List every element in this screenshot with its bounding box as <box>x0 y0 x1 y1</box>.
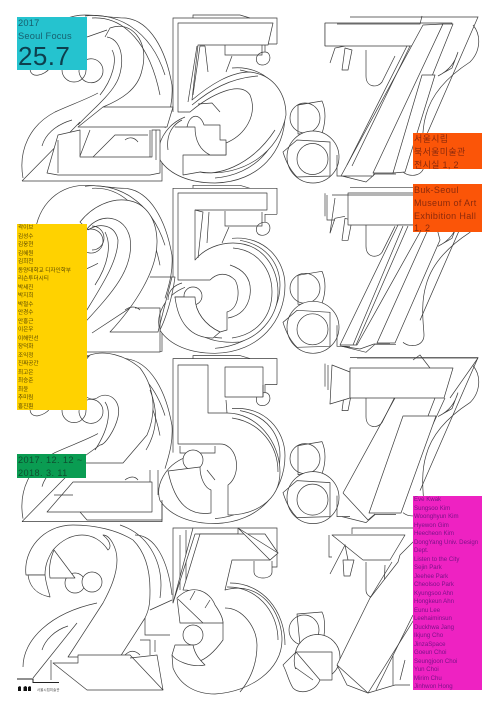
box: magenta artists English: DongYang Univ. Design <box>414 538 478 546</box>
numeral 7, row 4 <box>329 528 420 693</box>
logo: Seoul Museum of Art <box>17 678 60 692</box>
box: magenta artists English: Heecheon Kim <box>414 530 454 537</box>
box: magenta artists English: Leehaiminsun <box>414 615 452 622</box>
box: yellow artists Korean: 동양대학교 디자인학부 <box>18 268 71 274</box>
numeral 2, row 1 <box>47 26 173 175</box>
row 3: 25.7 <box>22 353 479 524</box>
box: teal title: 2017 <box>18 18 39 28</box>
box: yellow artists Korean: 박지희 <box>18 293 33 299</box>
box: green dates: 2018. 3. 11 <box>18 468 68 478</box>
box: green dates <box>17 454 86 478</box>
numeral 2, row 3 <box>47 353 162 520</box>
numeral 5, row 2 <box>168 193 278 342</box>
box: orange venue Korean: 북서울미술관 <box>414 147 465 157</box>
box: orange venue English: Buk-Seoul <box>414 185 459 195</box>
period, row 4 <box>283 612 340 692</box>
row 1: 25.7 <box>22 15 479 183</box>
box: yellow artists Korean: 박철수 <box>18 302 33 308</box>
numeral 5, row 3 <box>168 365 280 515</box>
box: magenta artists English: Eunu Lee <box>414 606 440 614</box>
box: magenta artists English: Eve Kwak <box>414 496 441 503</box>
numeral 2, row 2 <box>78 200 175 352</box>
box: magenta artists English: Kyungsoo Ahn <box>414 590 453 596</box>
box: yellow artists Korean: 김성수 <box>18 234 33 240</box>
box: magenta artists English: Sejin Park <box>414 564 442 571</box>
box: orange venue Korean: 전시실 1, 2 <box>414 160 459 170</box>
box: yellow artists Korean: 김웅현 <box>18 242 33 248</box>
box: green dates: 2017. 12. 12 ~ <box>18 455 83 465</box>
box: yellow artists Korean: 장덕화 <box>18 344 33 350</box>
box: magenta artists English: Hongkeun Ahn <box>414 598 454 605</box>
box: teal title: Seoul Focus <box>18 31 72 41</box>
box: yellow artists Korean: 조익정 <box>18 352 33 358</box>
box: yellow artists Korean: 김혜원 <box>18 250 33 256</box>
box: yellow artists Korean: 곽이브 <box>18 225 33 231</box>
numeral 7, row 3 <box>328 355 478 520</box>
box: orange venue English: 1, 2 <box>414 223 430 233</box>
box: yellow artists Korean: 이은우 <box>18 327 33 333</box>
box: yellow artists Korean: 추미림 <box>18 395 33 401</box>
row 4: 25.7 <box>23 525 420 694</box>
box: magenta artists English: Jeehee Park <box>414 572 448 580</box>
box: magenta artists English: Ikjung Cho <box>414 632 443 639</box>
box: yellow artists Korean: 진짜공간 <box>18 361 39 367</box>
box: magenta artists English: Jinhwon Hong <box>414 683 453 690</box>
box: magenta artists English: Dept. <box>414 547 429 554</box>
box: yellow artists Korean: 김희천 <box>18 259 33 265</box>
box: yellow artists Korean: 최윤 <box>18 386 28 392</box>
box: yellow artists Korean: 최고은 <box>18 370 33 376</box>
box: yellow artists Korean: 홍진훤 <box>18 404 33 410</box>
box: magenta artists English: Seungjoon Choi <box>414 658 457 664</box>
box: magenta artists English: Cheolsoo Park <box>414 581 454 588</box>
box: magenta artists English: Duckhwa Jang <box>414 624 454 630</box>
box: orange venue English <box>413 184 482 232</box>
box: orange venue Korean <box>413 133 482 169</box>
numeral 5, row 1 <box>168 23 286 175</box>
numeral 7, row 1 <box>325 16 453 176</box>
box: yellow artists Korean: 리슨투더시티 <box>18 276 49 282</box>
row 2: 25.7 <box>22 185 479 353</box>
box: magenta artists English <box>413 496 482 690</box>
box: yellow artists Korean: 안경수 <box>18 310 33 316</box>
box: yellow artists Korean: 안홍근 <box>18 318 33 324</box>
box: yellow artists Korean: 이해민선 <box>18 336 39 342</box>
box: magenta artists English: Mirim Chu <box>414 674 442 682</box>
numeral 2, row 4 <box>23 525 172 690</box>
box: magenta artists English: Yun Choi <box>414 666 439 673</box>
box: magenta artists English: JinzaSpace <box>414 640 446 648</box>
box: orange venue Korean: 서울시립 <box>414 134 448 144</box>
box: yellow artists Korean <box>17 224 87 410</box>
box: teal title <box>17 17 87 70</box>
numeral 5, row 4 <box>172 528 285 694</box>
box: orange venue English: Exhibition Hall <box>414 211 476 221</box>
box: magenta artists English: Sungsoo Kim <box>414 504 450 512</box>
box: orange venue English: Museum of Art <box>414 198 477 208</box>
box: magenta artists English: Goeun Choi <box>414 649 447 656</box>
numeral 7, row 2 <box>327 193 440 349</box>
box: magenta artists English: Listen to the City <box>414 556 459 562</box>
box: magenta artists English: Woonghyun Kim <box>414 513 459 520</box>
logo: Seoul Museum of Art: 서울시립미술관 <box>37 687 60 692</box>
box: yellow artists Korean: 박세진 <box>18 284 33 290</box>
box: yellow artists Korean: 최승준 <box>18 378 33 384</box>
box: magenta artists English: Hyewon Gim <box>414 522 449 528</box>
